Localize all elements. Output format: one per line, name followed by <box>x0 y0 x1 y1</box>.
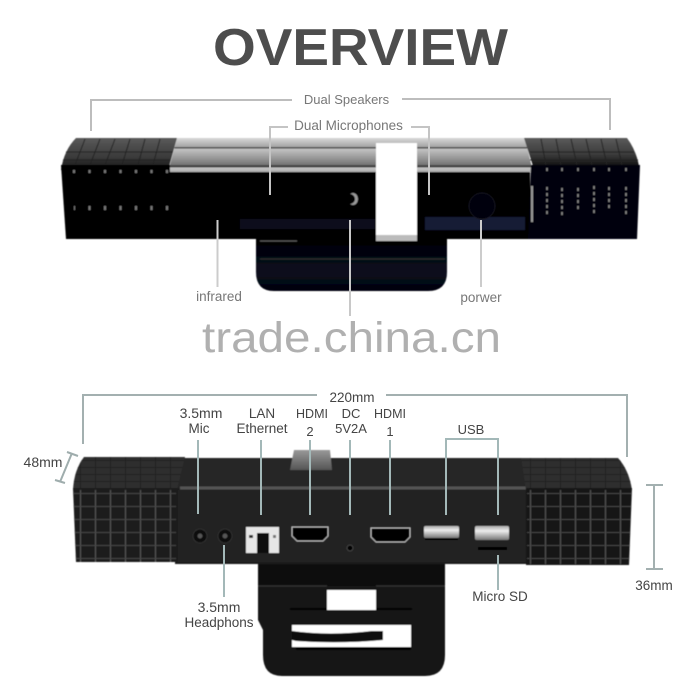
title: OVERVIEW <box>213 19 509 77</box>
watermark: trade.china.cn <box>202 314 501 362</box>
left speaker (front) <box>61 138 177 239</box>
dimension: 220mm: 220mm <box>329 390 375 405</box>
rear body <box>175 458 527 564</box>
label: LAN Ethernet: LAN <box>249 406 275 421</box>
dimension: 36mm <box>635 485 673 593</box>
label: Dual Speakers <box>91 92 610 131</box>
port: HDMI 2 <box>292 527 328 541</box>
label: Dual Speakers: Dual Speakers <box>304 92 390 107</box>
label: infrared: infrared <box>196 289 242 304</box>
label: infrared <box>196 220 242 304</box>
main body (front) <box>170 170 530 239</box>
label: USB: USB <box>458 422 484 437</box>
label: 3.5mm Headphons <box>184 545 254 630</box>
port: mic jack <box>193 529 207 543</box>
label: HDMI 2: HDMI <box>296 407 328 421</box>
label: USB <box>446 422 498 515</box>
port: HDMI 1 <box>371 528 410 542</box>
label: 3.5mm Headphons: Headphons <box>184 615 254 630</box>
label: LAN Ethernet: Ethernet <box>236 421 288 436</box>
rear stand <box>258 560 445 676</box>
label: porwer <box>460 220 502 305</box>
label: 3.5mm Headphons: 3.5mm <box>198 599 240 615</box>
label: HDMI 1 <box>374 407 406 515</box>
label: Dual Microphones <box>270 118 429 195</box>
dimension: 36mm: 36mm <box>635 578 673 593</box>
front view device <box>61 138 640 291</box>
label: DC 5V2A: 5V2A <box>335 421 367 436</box>
label: HDMI 1: 1 <box>386 424 394 439</box>
label: HDMI 1: HDMI <box>374 407 406 421</box>
label: porwer: porwer <box>460 290 502 305</box>
label: HDMI 2 <box>296 407 328 515</box>
port: USB 2 <box>475 526 509 540</box>
port: DC <box>347 545 353 551</box>
power button <box>469 193 495 219</box>
stand (front) <box>256 239 447 291</box>
label: camera pointer <box>349 220 351 316</box>
right speaker (front) <box>524 138 640 239</box>
top band <box>168 138 533 172</box>
right speaker (rear) <box>521 458 632 565</box>
dimension: 48mm: 48mm <box>24 454 62 470</box>
label: HDMI 2: 2 <box>306 424 314 439</box>
label: 3.5mm Mic: 3.5mm <box>180 405 222 421</box>
label: 3.5mm Mic: Mic <box>188 421 210 436</box>
label: 3.5mm Mic <box>180 405 222 514</box>
label: LAN Ethernet <box>236 406 288 515</box>
rear view device <box>73 450 632 676</box>
clip <box>290 450 332 470</box>
label: DC 5V2A <box>335 406 367 515</box>
dimension: 220mm <box>83 390 627 457</box>
white cutout <box>376 143 417 235</box>
label: Micro SD: Micro SD <box>472 589 528 604</box>
label: Micro SD <box>472 555 528 604</box>
port: LAN <box>246 527 279 553</box>
label: Dual Microphones: Dual Microphones <box>294 118 403 133</box>
dimension: 48mm <box>24 452 78 483</box>
left speaker (rear) <box>73 457 185 562</box>
camera lens <box>348 193 358 205</box>
port: USB 1 <box>424 526 459 540</box>
port: headphone jack <box>218 529 232 543</box>
label: DC 5V2A: DC <box>342 406 360 421</box>
port: Micro SD <box>478 547 507 550</box>
